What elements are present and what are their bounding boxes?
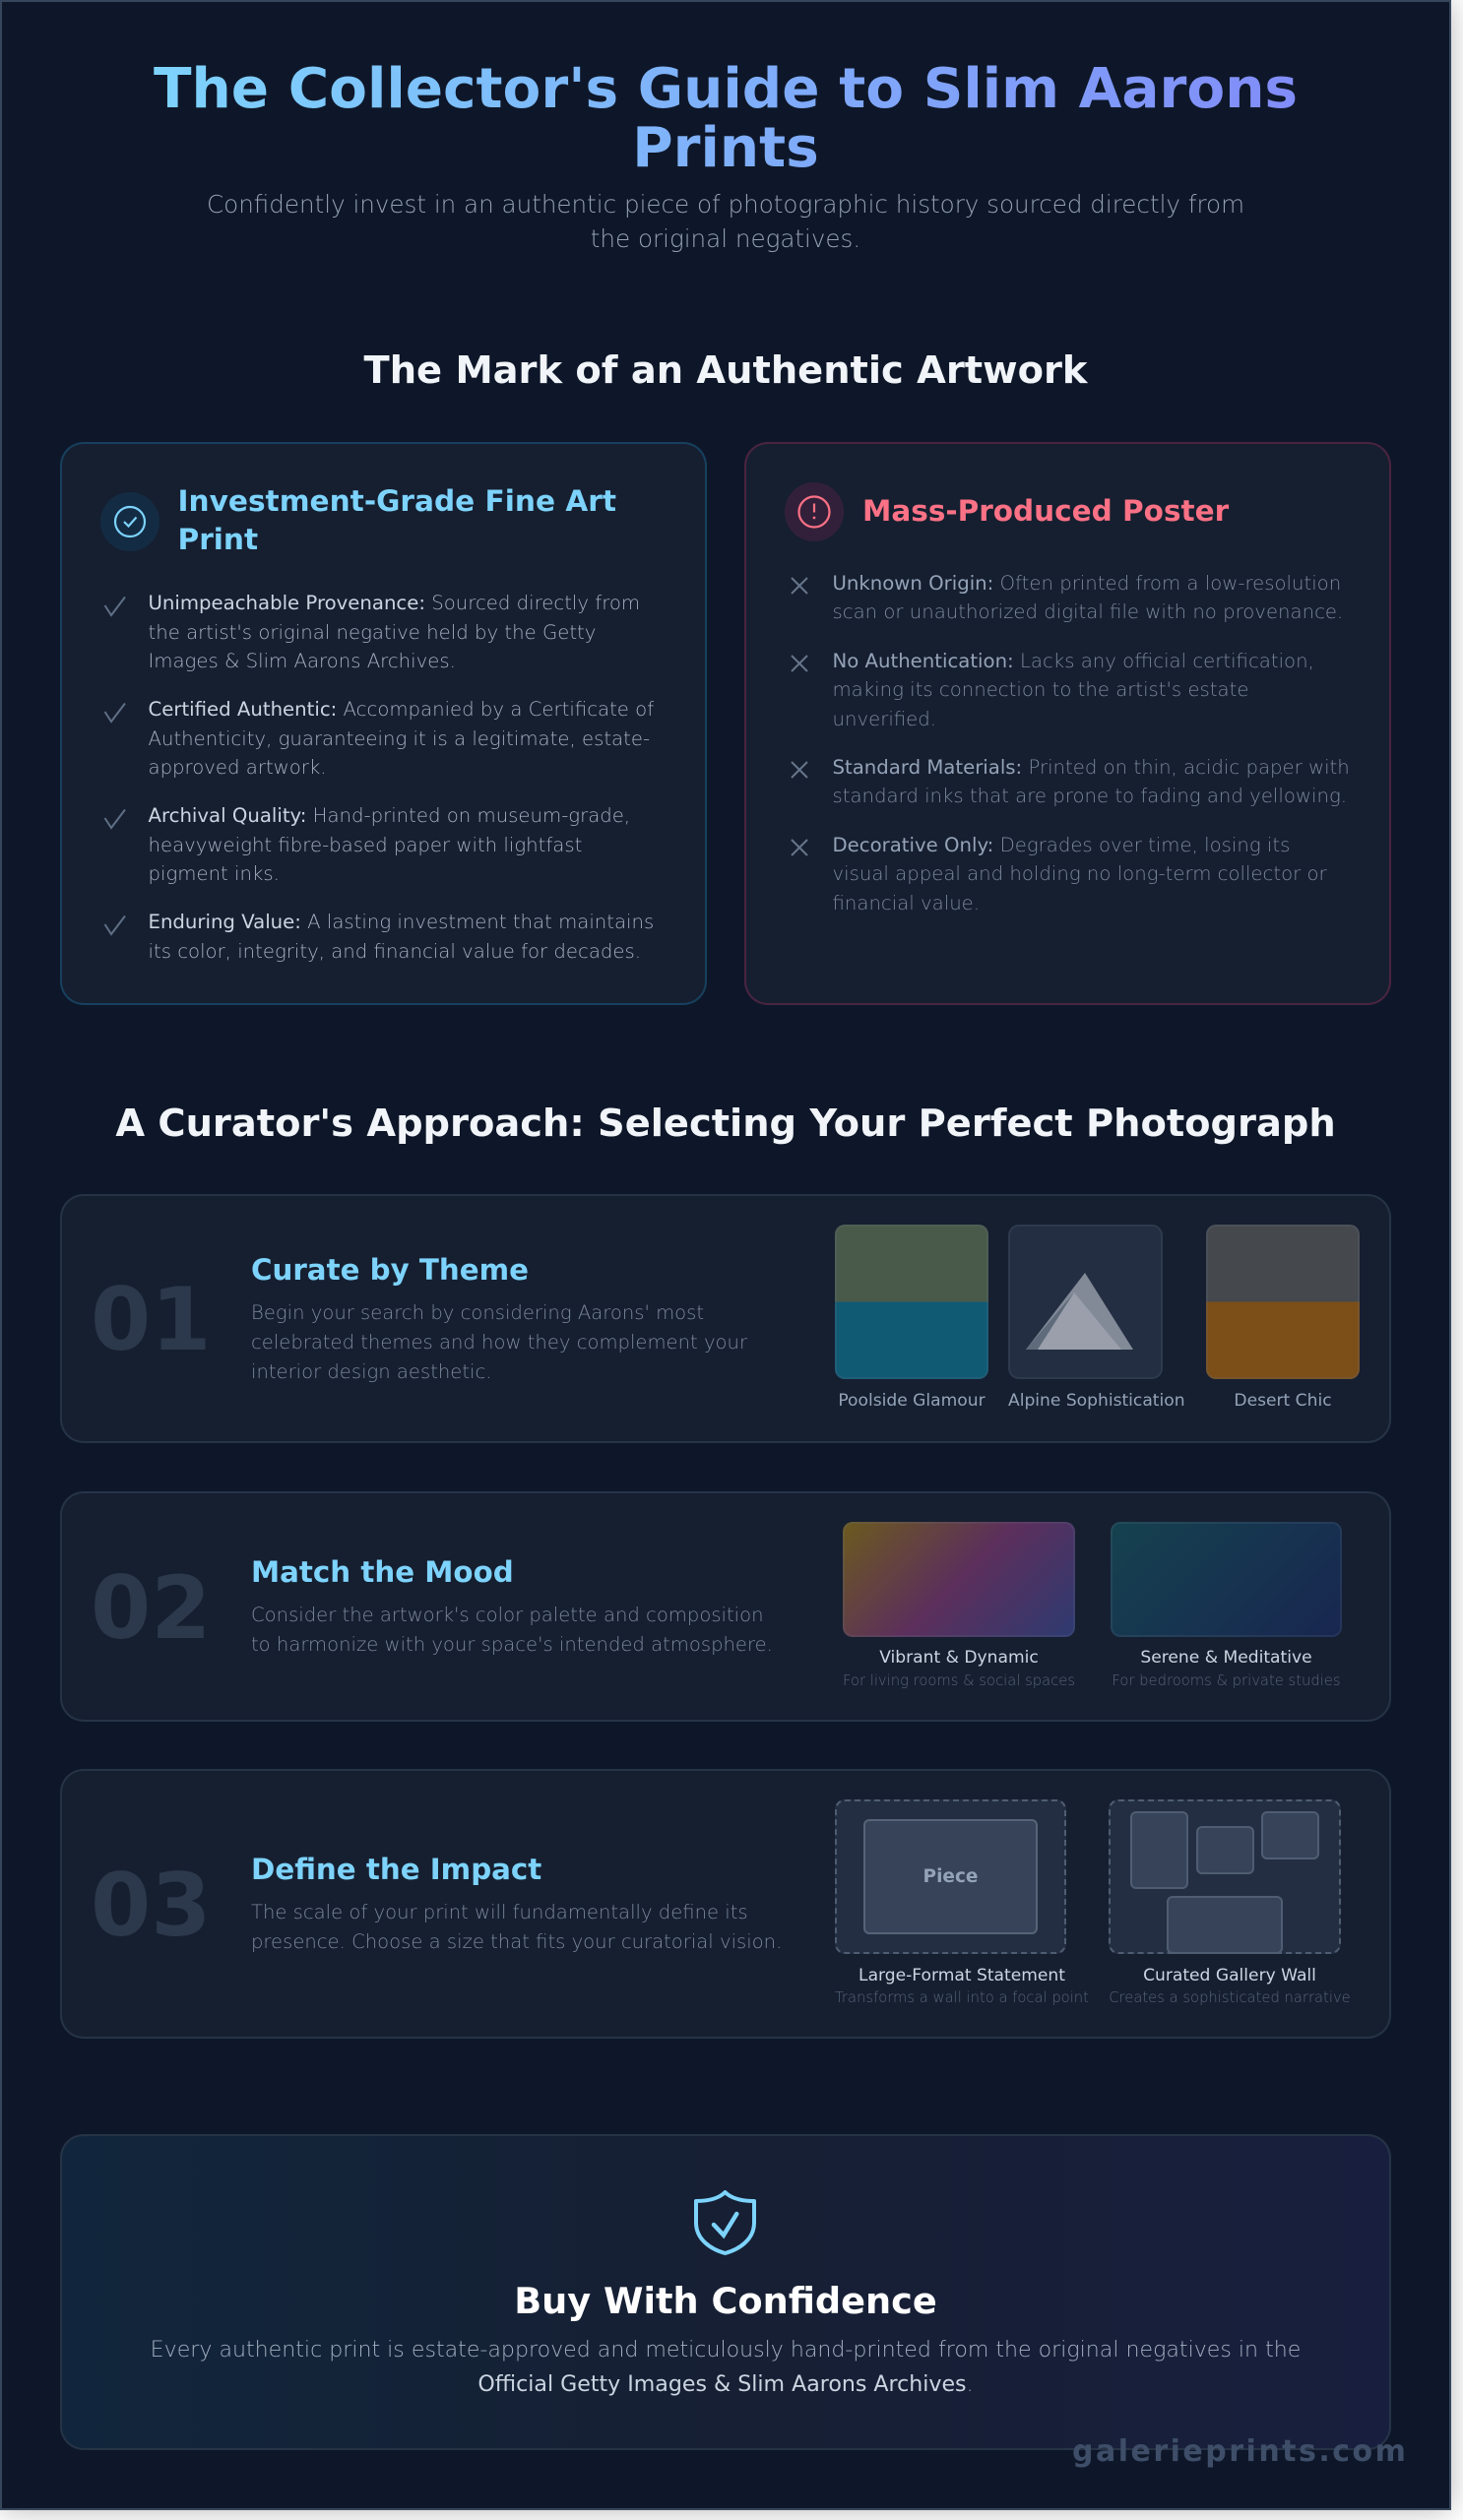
panel heading: Mass-Produced Poster bbox=[862, 494, 1229, 528]
step description: The scale of your print will fundamentally define its bbox=[251, 1901, 748, 1923]
tile: large-format statement bbox=[835, 1799, 1089, 2006]
item: provenance: Unimpeachable Provenance: Sourced directly from bbox=[148, 592, 640, 614]
item: provenance: Images & Slim Aarons Archives. bbox=[148, 650, 456, 672]
panel: step 03 define the impact bbox=[60, 1769, 1391, 2039]
wall diagram bbox=[835, 1799, 1066, 1954]
item: decorative: Decorative Only: Degrades over time, losing its bbox=[833, 833, 1290, 856]
step number: 03 bbox=[91, 1855, 211, 1956]
section heading: authentic artwork: The Mark of an Authentic Artwork bbox=[364, 348, 1087, 393]
panel: investment-grade fine art print bbox=[60, 442, 707, 1005]
item: materials bbox=[791, 756, 1350, 807]
label: Large-Format Statement bbox=[859, 1966, 1065, 1985]
sublabel: Creates a sophisticated narrative bbox=[1109, 1988, 1351, 2006]
step description: to harmonize with your space's intended atmosphere. bbox=[251, 1633, 773, 1656]
swatch bbox=[843, 1522, 1075, 1637]
label: Poolside Glamour bbox=[838, 1390, 986, 1410]
item: authentication: unverified. bbox=[833, 707, 936, 730]
frame c bbox=[1261, 1811, 1319, 1859]
sublabel: Transforms a wall into a focal point bbox=[835, 1988, 1089, 2006]
step description: interior design aesthetic. bbox=[251, 1360, 491, 1383]
item: materials: standard inks that are prone to fading and yellowing. bbox=[833, 785, 1347, 807]
title: Prints bbox=[632, 116, 819, 179]
swatch bbox=[1111, 1522, 1342, 1637]
item: value: its color, integrity, and financial value for decades. bbox=[148, 939, 641, 963]
item: value bbox=[104, 911, 654, 963]
title bbox=[0, 59, 1451, 177]
panel heading bbox=[177, 484, 616, 556]
item: origin: scan or unauthorized digital file with no provenance. bbox=[833, 600, 1343, 623]
item: certified bbox=[104, 698, 654, 779]
item: certified: approved artwork. bbox=[148, 756, 327, 779]
subtitle bbox=[207, 190, 1244, 253]
label: Serene & Meditative bbox=[1140, 1648, 1312, 1668]
panel: step 02 match the mood bbox=[60, 1491, 1391, 1722]
panel: buy with confidence bbox=[60, 2134, 1391, 2450]
item: archival: Archival Quality: Hand-printed on museum-grade, bbox=[148, 804, 630, 827]
list: poster drawbacks bbox=[791, 571, 1350, 914]
label: Alpine Sophistication bbox=[1008, 1390, 1185, 1410]
swatch bbox=[1206, 1225, 1360, 1379]
cta text: Every authentic print is estate-approved and meticulously hand-printed from the original negatives in the bbox=[151, 2337, 1301, 2362]
label: Curated Gallery Wall bbox=[1143, 1966, 1316, 1985]
tile: serene and meditative bbox=[1111, 1522, 1342, 1689]
tile: alpine sophistication bbox=[1008, 1225, 1185, 1410]
cta text bbox=[151, 2337, 1301, 2397]
panel: mass-produced poster bbox=[744, 442, 1391, 1005]
step number: 01 bbox=[91, 1269, 211, 1370]
section heading: curator's approach: A Curator's Approach: Selecting Your Perfect Photograph bbox=[115, 1102, 1336, 1146]
item: origin: Unknown Origin: Often printed from a low-resolution bbox=[833, 571, 1341, 595]
subtitle: Confidently invest in an authentic piece of photographic history sourced directly from bbox=[207, 190, 1244, 219]
watermark: galerieprints.com bbox=[1072, 2434, 1408, 2469]
item: origin bbox=[791, 571, 1343, 623]
swatch bbox=[835, 1225, 988, 1379]
cta heading: Buy With Confidence bbox=[514, 2280, 937, 2321]
icon: alert in circle bbox=[785, 482, 844, 541]
sublabel: For bedrooms & private studies bbox=[1112, 1672, 1341, 1689]
label: Desert Chic bbox=[1234, 1390, 1332, 1410]
label: Vibrant & Dynamic bbox=[879, 1648, 1039, 1668]
item: archival bbox=[104, 804, 630, 885]
item: certified: Certified Authentic: Accompanied by a Certificate of bbox=[148, 698, 654, 721]
step description: Consider the artwork's color palette and composition bbox=[251, 1604, 764, 1626]
item: provenance: the artist's original negative held by the Getty bbox=[148, 620, 596, 644]
step heading: Curate by Theme bbox=[251, 1253, 529, 1287]
item: certified: Authenticity, guaranteeing it is a legitimate, estate- bbox=[148, 726, 650, 750]
step number: 02 bbox=[91, 1557, 211, 1659]
title: The Collector's Guide to Slim Aarons bbox=[154, 57, 1298, 120]
subtitle: the original negatives. bbox=[591, 224, 860, 253]
step description bbox=[251, 1604, 773, 1656]
item: materials: Standard Materials: Printed on thin, acidic paper with bbox=[833, 756, 1350, 778]
list: authentic qualities bbox=[104, 592, 654, 963]
tile: poolside glamour bbox=[835, 1225, 988, 1410]
item: decorative bbox=[791, 833, 1327, 914]
step description bbox=[251, 1901, 782, 1953]
item: authentication bbox=[791, 650, 1314, 730]
item: decorative: financial value. bbox=[833, 892, 980, 914]
wall diagram bbox=[1109, 1799, 1341, 1954]
panel: step 01 curate by theme bbox=[60, 1194, 1391, 1443]
tile: curated gallery wall bbox=[1109, 1799, 1351, 2006]
icon: shield check bbox=[694, 2190, 756, 2255]
piece bbox=[863, 1819, 1038, 1934]
step description: Begin your search by considering Aarons' most bbox=[251, 1301, 704, 1324]
panel heading: Investment-Grade Fine Art bbox=[177, 484, 616, 518]
sublabel: For living rooms & social spaces bbox=[843, 1672, 1075, 1689]
step description: presence. Choose a size that fits your curatorial vision. bbox=[251, 1930, 782, 1953]
frame b bbox=[1196, 1826, 1254, 1874]
tile: desert chic bbox=[1206, 1225, 1360, 1410]
cta text: Official Getty Images & Slim Aarons Archives. bbox=[477, 2371, 974, 2397]
item: value: Enduring Value: A lasting investment that maintains bbox=[148, 911, 654, 933]
frame d bbox=[1167, 1896, 1283, 1954]
step heading: Match the Mood bbox=[251, 1555, 514, 1589]
swatch with mountain bbox=[1008, 1225, 1163, 1379]
item: authentication: No Authentication: Lacks any official certification, bbox=[833, 650, 1314, 671]
item: authentication: making its connection to the artist's estate bbox=[833, 678, 1248, 701]
item: decorative: visual appeal and holding no long-term collector or bbox=[833, 862, 1327, 885]
step description bbox=[251, 1301, 748, 1383]
tile: vibrant and dynamic bbox=[843, 1522, 1075, 1689]
step description: celebrated themes and how they complement your bbox=[251, 1331, 747, 1354]
piece: Piece bbox=[923, 1866, 978, 1887]
step heading: Define the Impact bbox=[251, 1853, 541, 1886]
item: archival: pigment inks. bbox=[148, 862, 280, 885]
icon: check in circle bbox=[100, 492, 159, 551]
frame a bbox=[1130, 1811, 1188, 1889]
item: archival: heavyweight fibre-based paper with lightfast bbox=[148, 833, 582, 856]
panel heading: Print bbox=[177, 523, 258, 556]
item: provenance bbox=[104, 592, 640, 672]
